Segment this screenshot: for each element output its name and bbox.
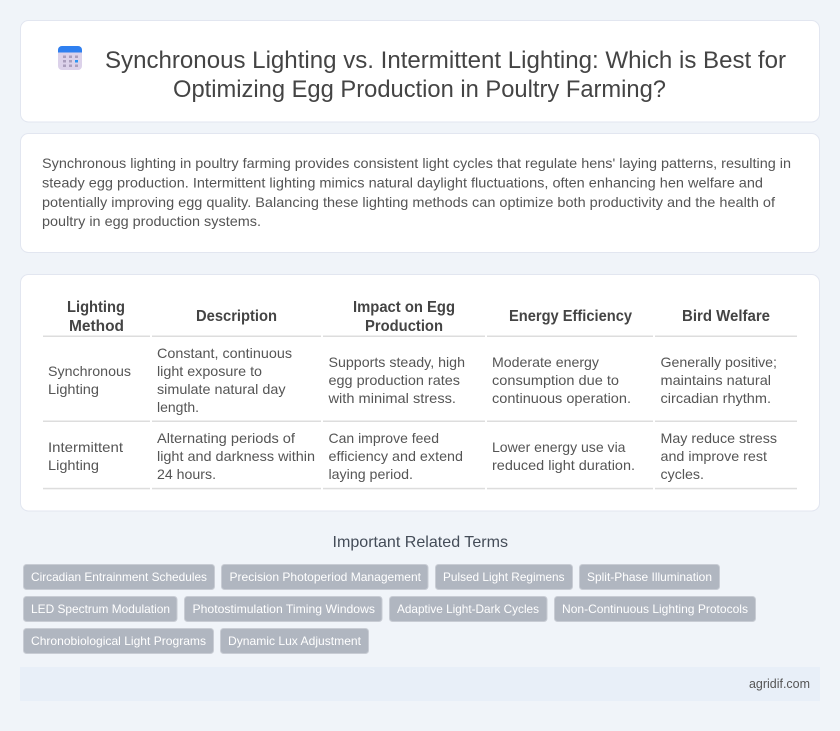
table row: intermittent lighting: 24 hours.	[157, 466, 216, 482]
table row: intermittent lighting: efficiency and extend	[328, 448, 463, 464]
table row: synchronous lighting: Constant, continuous	[157, 345, 292, 361]
table row: intermittent lighting: Lower energy use via	[492, 439, 626, 455]
table row: synchronous lighting: Supports steady, high	[328, 354, 465, 370]
table header row: Energy Efficiency	[509, 308, 632, 325]
table row: synchronous lighting: maintains natural	[660, 372, 771, 388]
table row: synchronous lighting: Moderate energy	[492, 354, 599, 370]
panel: related term tags: Adaptive Light-Dark Cycles	[397, 602, 539, 616]
title: Optimizing Egg Production in Poultry Farming?	[173, 76, 666, 103]
table row: intermittent lighting: Can improve feed	[328, 430, 439, 446]
panel: summary paragraph: steady egg production. Intermittent lighting mimics natural daylight fluctuations, often enhancing hen welfare and	[42, 174, 763, 190]
table row: synchronous lighting: length.	[157, 399, 199, 415]
title	[105, 47, 786, 103]
panel: title header	[20, 20, 820, 122]
table row: synchronous lighting	[43, 345, 797, 422]
table row: synchronous lighting: egg production rates	[328, 372, 460, 388]
table header row: Method	[69, 318, 124, 335]
table header row: Bird Welfare	[682, 308, 770, 325]
table header row: Production	[365, 318, 443, 335]
table row: intermittent lighting: cycles.	[660, 466, 704, 482]
table row: intermittent lighting: Alternating periods of	[157, 430, 295, 446]
table row: synchronous lighting: Generally positive;	[660, 354, 777, 370]
table row: intermittent lighting: and improve rest	[660, 448, 767, 464]
panel: related term tags: LED Spectrum Modulation	[31, 602, 170, 616]
footer: agridif.com	[749, 676, 810, 691]
table row: synchronous lighting: simulate natural day	[157, 381, 286, 397]
panel: related term tags: Pulsed Light Regimens	[443, 570, 564, 584]
panel: related term tags: Chronobiological Light Programs	[31, 634, 206, 648]
panel: summary paragraph: potentially improving egg quality. Balancing these lighting methods can optimize both productivity and the health of	[42, 194, 775, 210]
heading: important related terms: Important Related Terms	[332, 534, 508, 551]
panel: comparison table	[20, 274, 820, 511]
panel: summary paragraph	[20, 134, 820, 252]
table row: intermittent lighting: Lighting	[48, 457, 99, 473]
table row: intermittent lighting: light and darkness within	[157, 448, 315, 464]
table row: intermittent lighting: reduced light duration.	[492, 457, 635, 473]
panel: related term tags	[24, 564, 756, 654]
panel: related term tags: Photostimulation Timing Windows	[192, 602, 375, 616]
panel: summary paragraph: poultry in egg production systems.	[42, 213, 261, 229]
panel: related term tags: Dynamic Lux Adjustment	[228, 634, 362, 648]
table row: intermittent lighting	[43, 430, 797, 489]
panel: summary paragraph: Synchronous lighting in poultry farming provides consistent light cycles that regulate hens' laying patterns, resulting in	[42, 155, 791, 171]
panel: related term tags: Split-Phase Illumination	[587, 570, 712, 584]
table row: synchronous lighting: consumption due to	[492, 372, 619, 388]
table row: intermittent lighting: Intermittent	[48, 439, 123, 455]
table row: synchronous lighting: continuous operation.	[492, 390, 631, 406]
panel: related term tags: Precision Photoperiod Management	[230, 570, 422, 584]
footer	[20, 667, 820, 701]
table row: synchronous lighting: circadian rhythm.	[660, 390, 771, 406]
table row: intermittent lighting: laying period.	[328, 466, 413, 482]
icon: calendar	[58, 46, 82, 70]
table header row	[43, 299, 797, 337]
table row: synchronous lighting: Lighting	[48, 381, 99, 397]
table row: intermittent lighting: May reduce stress	[660, 430, 777, 446]
table row: synchronous lighting: Synchronous	[48, 363, 131, 379]
table row: synchronous lighting: with minimal stress.	[327, 390, 456, 406]
panel: related term tags: Circadian Entrainment Schedules	[31, 570, 207, 584]
table header row: Description	[196, 308, 277, 325]
table row: synchronous lighting: light exposure to	[157, 363, 262, 379]
panel: related term tags: Non-Continuous Lighting Protocols	[562, 602, 748, 616]
table header row: Lighting	[67, 299, 125, 316]
table header row: Impact on Egg	[353, 299, 455, 316]
title: Synchronous Lighting vs. Intermittent Lighting: Which is Best for	[105, 47, 786, 74]
